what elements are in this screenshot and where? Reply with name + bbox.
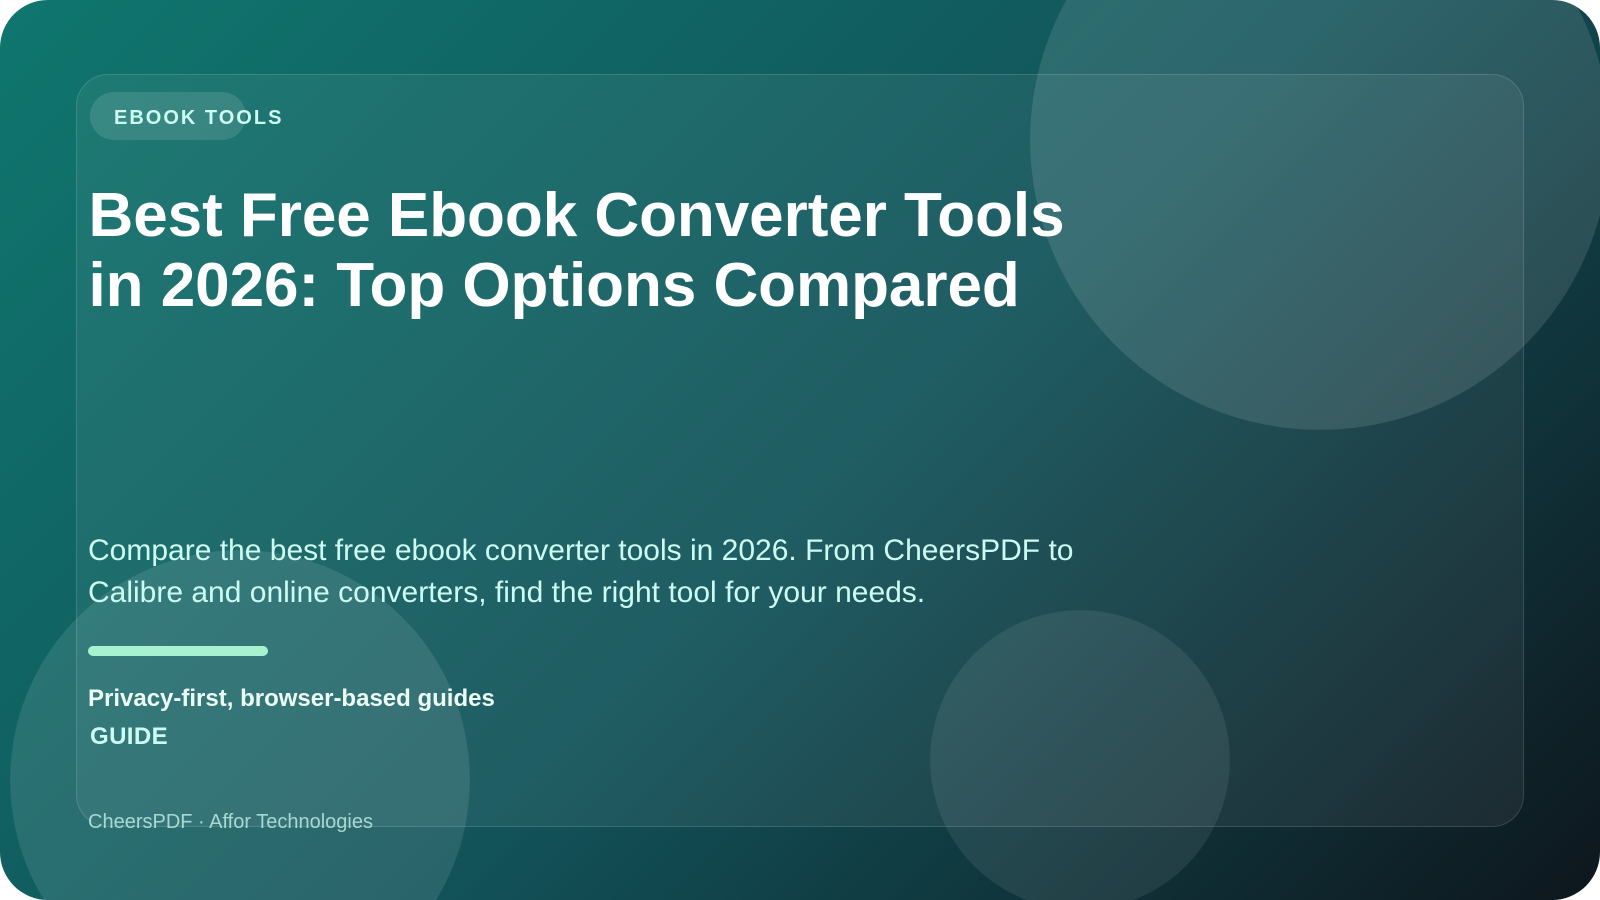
decorative circle: top right — [1030, 0, 1600, 430]
decorative circle: bottom left — [10, 550, 470, 900]
guide label: GUIDE — [90, 723, 168, 750]
glass panel — [76, 74, 1524, 827]
description — [88, 534, 1073, 609]
tagline: Privacy-first, browser-based guides — [88, 685, 495, 712]
category pill — [90, 92, 246, 140]
title: in 2026: Top Options Compared — [88, 251, 1020, 320]
description: Compare the best free ebook converter tools in 2026. From CheersPDF to — [88, 534, 1073, 567]
title — [88, 181, 1065, 320]
category label: EBOOK TOOLS — [114, 107, 283, 129]
accent bar — [88, 646, 268, 656]
description: Calibre and online converters, find the right tool for your needs. — [88, 576, 925, 609]
footer credit: CheersPDF · Affor Technologies — [88, 811, 373, 833]
title: Best Free Ebook Converter Tools — [88, 181, 1065, 250]
decorative circle: bottom centre — [930, 610, 1230, 900]
